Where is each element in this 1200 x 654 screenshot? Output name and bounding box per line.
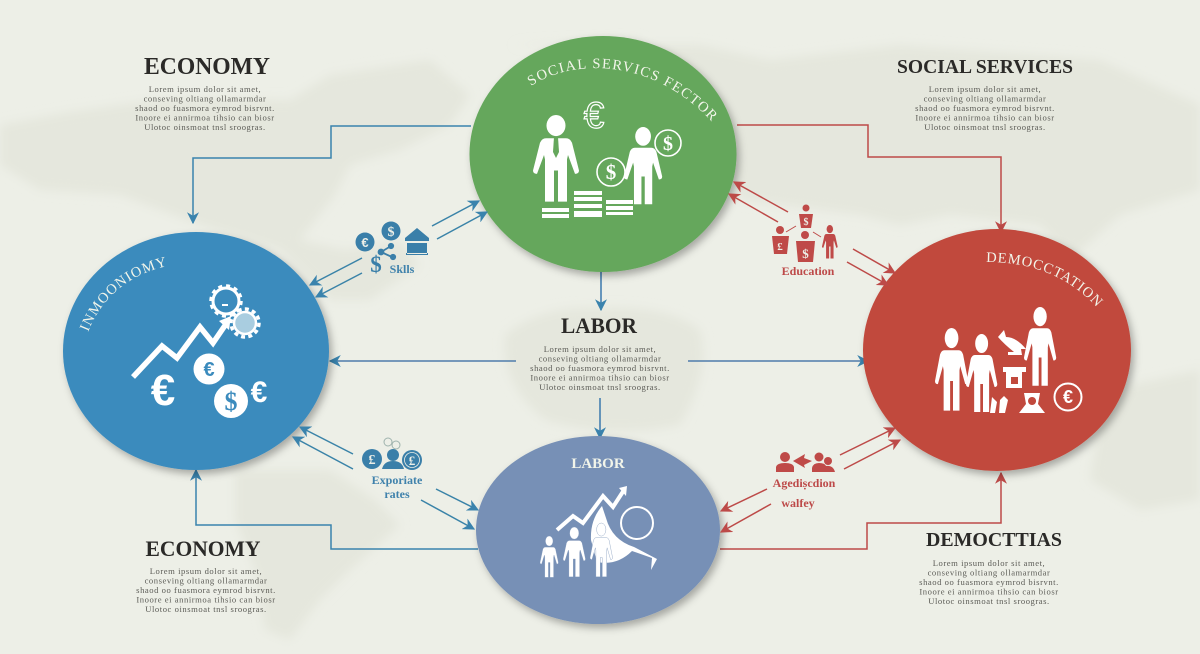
- icon: dollar coin upper: [655, 130, 681, 156]
- icon: share: [378, 244, 395, 259]
- icon: euro coin: €: [361, 235, 369, 250]
- text block: Ulotoc oinsmoat tnsl sroogras.: [144, 122, 266, 132]
- icon: top podium: [799, 204, 813, 228]
- connector: labor text to democracy: [688, 360, 868, 362]
- panel: economy bottom: [136, 536, 276, 614]
- arrows: exchange pairs: [293, 427, 478, 529]
- callout: education: [729, 182, 895, 285]
- icon: left podium: [772, 226, 789, 254]
- text block: shaod oo fuasmora eymrod bisrvnt.: [135, 103, 275, 113]
- heading: ECONOMY: [146, 536, 261, 561]
- icon: arrow: [793, 454, 812, 468]
- icon: top podium: $: [804, 217, 808, 228]
- text block: [919, 558, 1059, 606]
- icon: dollar coin: $: [224, 387, 238, 416]
- icon: euro coin: [356, 232, 374, 252]
- icon: growth arrow: [557, 486, 627, 530]
- circle: social services: [468, 36, 744, 280]
- icon: euro coin: [1054, 384, 1082, 410]
- text block: Inoore ei annirmoa tihsio can biosr: [530, 372, 670, 382]
- icon: people: [540, 523, 613, 577]
- icon: plant: [990, 396, 1008, 413]
- connector: social services down to labor text: [600, 270, 602, 310]
- text block: Lorem ipsum dolor sit amet,: [149, 84, 261, 94]
- text block: conseving oltiang ollamarmdar: [928, 568, 1050, 578]
- icon: dollar coin: [382, 222, 400, 240]
- heading: SOCIAL SERVICES: [897, 56, 1073, 78]
- connector: social services to economy: [193, 126, 471, 223]
- icon: businessman: [533, 115, 579, 202]
- icon: small euro: €: [251, 376, 268, 409]
- icon: small gears: [384, 438, 400, 449]
- heading: DEMOCTTIAS: [926, 529, 1062, 551]
- label: aged education: Agediṣcdion: [773, 476, 836, 490]
- panel: social services: [897, 56, 1073, 132]
- text block: Inoore ei annirmoa tihsio can biosr: [135, 112, 275, 122]
- icon: upper gear: [211, 286, 241, 316]
- icon: euro coin: €: [1063, 387, 1073, 407]
- callout: skills: [310, 201, 487, 297]
- label: welfare: walfey: [781, 496, 815, 510]
- icon: dollar coin: $: [388, 225, 394, 240]
- label: labor: LABOR: [571, 456, 625, 472]
- text block: shaod oo fuasmora eymrod bisrvnt.: [915, 103, 1055, 113]
- text block: Ulotoc oinsmoat tnsl sroogras.: [924, 122, 1046, 132]
- heading: LABOR: [561, 313, 638, 338]
- icon: left podium: £: [777, 241, 783, 253]
- icon: center podium: $: [802, 246, 809, 261]
- icon: pound coin outline: £: [409, 453, 416, 468]
- icon: dollar coin: [214, 384, 248, 418]
- text block: Lorem ipsum dolor sit amet,: [150, 566, 262, 576]
- text block: shaod oo fuasmora eymrod bisrvnt.: [530, 363, 670, 373]
- text block: [135, 84, 275, 132]
- arrows: skills pairs: [310, 201, 487, 297]
- panel: economy top: [135, 54, 275, 132]
- arrows: aged pairs: [721, 428, 900, 532]
- icon: scale: [1019, 393, 1045, 413]
- connector: labor text to economy: [330, 360, 516, 362]
- icon: euro outline: €: [584, 95, 605, 136]
- text block: Inoore ei annirmoa tihsio can biosr: [919, 586, 1059, 596]
- callout: exchange rates: [293, 427, 478, 529]
- circle: labor: [476, 436, 720, 624]
- text block: conseving oltiang ollamarmdar: [539, 354, 661, 364]
- flow connectors: [193, 125, 1001, 549]
- label: education: Education: [782, 264, 835, 278]
- icon: euro coin: [194, 354, 224, 384]
- text block: Ulotoc oinsmoat tnsl sroogras.: [145, 604, 267, 614]
- icon: group bust: [812, 452, 835, 472]
- icon: pound coin: [362, 449, 382, 469]
- text block: Lorem ipsum dolor sit amet,: [933, 558, 1045, 568]
- icon: coin stacks: [542, 191, 633, 218]
- text block: [915, 84, 1055, 132]
- icon: family: [935, 307, 1056, 412]
- icon: person bust: [382, 449, 404, 469]
- callout: aged education: [721, 428, 900, 532]
- connector: labor to economy: [196, 470, 478, 549]
- icon: bird statue: [998, 330, 1026, 355]
- icon: large euro: €: [151, 366, 175, 415]
- connector: labor text down to labor circle: [599, 398, 601, 438]
- arc label: democracy: DEMOCCTATION: [986, 252, 1104, 306]
- icon: dollar coin upper: $: [663, 133, 673, 155]
- icon: euro coin: €: [203, 359, 215, 381]
- circle: economy: [62, 232, 336, 478]
- icon: center podium: [796, 231, 815, 262]
- text block: shaod oo fuasmora eymrod bisrvnt.: [919, 577, 1059, 587]
- icon: lower gear: [231, 309, 259, 337]
- text block: Lorem ipsum dolor sit amet,: [544, 344, 656, 354]
- text block: conseving oltiang ollamarmdar: [144, 94, 266, 104]
- panel: labor center: [530, 313, 670, 392]
- text block: Inoore ei annirmoa tihsio can biosr: [136, 594, 276, 604]
- panel: democracy bottom: [919, 529, 1062, 606]
- icon: worker: [624, 127, 662, 204]
- icon: dollar: $: [370, 252, 382, 277]
- heading: ECONOMY: [144, 54, 270, 80]
- connector: social services to democracy: [737, 125, 1001, 232]
- arc label: economy: INMOONIOMY: [80, 256, 164, 332]
- icon: growth arrow: [133, 316, 231, 377]
- icon: person bust: [776, 452, 794, 472]
- circle: democracy: [862, 228, 1138, 480]
- icon: bank: [405, 228, 429, 255]
- label: skills: Sklls: [390, 262, 415, 276]
- icon: dollar coin lower: $: [606, 160, 616, 184]
- text block: conseving oltiang ollamarmdar: [145, 576, 267, 586]
- icon: dollar coin lower: [597, 158, 625, 186]
- arrows: education pairs: [729, 182, 895, 285]
- text block: Ulotoc oinsmoat tnsl sroogras.: [539, 382, 661, 392]
- text block: shaod oo fuasmora eymrod bisrvnt.: [136, 585, 276, 595]
- arc label: social services: SOCIAL SERVICS FECTOR: [528, 58, 716, 122]
- icon: pound coin outline: [402, 450, 422, 470]
- label: rates: rates: [384, 487, 410, 501]
- connector: labor to democracy: [720, 473, 1001, 549]
- icon: person: [822, 225, 838, 259]
- text block: Ulotoc oinsmoat tnsl sroogras.: [928, 596, 1050, 606]
- label: exchange rates: Exporiate: [372, 473, 423, 487]
- icon: magnifier: [591, 506, 657, 570]
- text block: Lorem ipsum dolor sit amet,: [929, 84, 1041, 94]
- text block: [136, 566, 276, 614]
- text block: Inoore ei annirmoa tihsio can biosr: [915, 112, 1055, 122]
- icon: ballot box: [1003, 367, 1026, 388]
- text block: [530, 344, 670, 392]
- icon: pound coin: £: [368, 453, 376, 468]
- text block: conseving oltiang ollamarmdar: [924, 94, 1046, 104]
